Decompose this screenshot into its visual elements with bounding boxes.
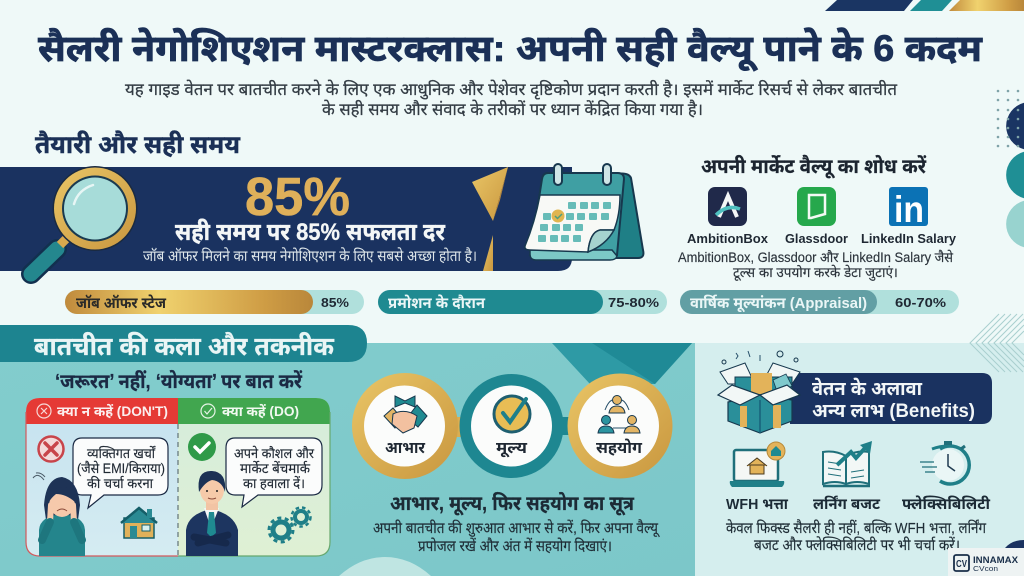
panel: 85 percent banner xyxy=(0,167,572,271)
illustration: worried woman xyxy=(33,473,85,556)
decoration: right edge circles and dots xyxy=(997,90,1024,247)
research labels: Glassdoor xyxy=(785,232,848,246)
research description: टूल्स का उपयोग करके डेटा जुटाएं। xyxy=(733,263,898,282)
circle: value: मूल्य xyxy=(496,440,528,458)
illustration: confident man xyxy=(186,471,238,556)
bar: job offer stage 85%: 85% xyxy=(321,296,349,310)
do header: क्या कहें (DO) xyxy=(222,403,299,419)
intro text: यह गाइड वेतन पर बातचीत करने के लिए एक आधुनिक और पेशेवर दृष्टिकोण प्रदान करती है। इसमें मार्केट रिसर्च से लेकर बातचीत xyxy=(125,80,898,100)
logo: Innamax CVcon xyxy=(948,540,1024,576)
heading tab: art of conversation: बातचीत की कला और तकनीक xyxy=(34,331,334,361)
logo: Innamax CVcon: CVcon xyxy=(973,564,998,573)
speech bubble: do: मार्केट बेंचमार्क xyxy=(240,460,311,476)
speech bubble: do xyxy=(226,438,322,507)
icon: green check xyxy=(188,433,216,461)
icon: gears xyxy=(269,508,310,542)
icon: stopwatch xyxy=(920,441,969,484)
text: benefits description: बजट और फ्लेक्सिबिलिटी पर भी चर्चा करें। xyxy=(754,536,960,554)
decoration: chevron lines xyxy=(970,314,1024,372)
title: सैलरी नेगोशिएशन मास्टरक्लास: अपनी सही वैल्यू पाने के 6 कदम xyxy=(38,27,983,71)
speech bubble: do: अपने कौशल और xyxy=(234,444,314,461)
benefit labels: फ्लेक्सिबिलिटी xyxy=(902,495,991,513)
speech bubble: do: का हवाला दें। xyxy=(243,475,305,491)
research description xyxy=(678,248,954,282)
panel: gratitude value collaboration circles xyxy=(352,373,672,479)
heading: formula: आभार, मूल्य, फिर सहयोग का सूत्र xyxy=(390,491,635,516)
research labels: AmbitionBox xyxy=(687,232,768,246)
speech bubble: don't xyxy=(73,438,168,508)
section heading: preparation: तैयारी और सही समय xyxy=(35,130,241,159)
top corner stripes xyxy=(825,0,1024,11)
speech bubble: don't: व्यक्तिगत खर्चों xyxy=(87,445,156,461)
don't header: क्या न कहें (DON'T) xyxy=(57,403,168,419)
text: formula description: प्रपोजल रखें और अंत में सहयोग दिखाएं। xyxy=(418,537,612,555)
research heading: अपनी मार्केट वैल्यू का शोध करें xyxy=(701,154,927,179)
bar: appraisal 60-70% xyxy=(680,290,959,314)
research description: AmbitionBox, Glassdoor और LinkedIn Salary जैसे xyxy=(678,248,954,265)
icon: red cross xyxy=(38,436,64,462)
intro text xyxy=(125,80,898,119)
heading tab: art of conversation xyxy=(0,325,367,362)
bar: job offer stage 85%: जॉब ऑफर स्टेज xyxy=(76,294,167,312)
speech bubble: don't: (जैसे EMI/किराया) xyxy=(77,459,165,476)
icon: book with arrow xyxy=(823,441,872,486)
icon: house xyxy=(121,508,157,538)
bar: during promotion 75-80% xyxy=(378,290,667,314)
don't header xyxy=(26,398,178,424)
icon: calendar xyxy=(525,164,643,260)
logo: Innamax CVcon: INNAMAX xyxy=(973,555,1018,565)
circle: collaboration: सहयोग xyxy=(596,439,643,457)
circle: value xyxy=(471,386,552,466)
icon: gift box xyxy=(718,351,800,433)
panel: benefits title pill: अन्य लाभ (Benefits) xyxy=(812,401,975,422)
big number: 85% xyxy=(245,167,350,227)
panel: benefits title pill: वेतन के अलावा xyxy=(812,377,922,400)
icon: WFH laptop xyxy=(730,442,785,487)
text: benefits description xyxy=(726,519,986,554)
research labels xyxy=(687,232,956,246)
panel: benefits background xyxy=(695,343,1024,576)
circle: gratitude: आभार xyxy=(385,440,426,457)
text: formula description: अपनी बातचीत की शुरुआत आभार से करें, फिर अपना वैल्यू xyxy=(373,519,660,538)
benefit labels: लर्निंग बजट xyxy=(813,495,881,513)
bar: appraisal 60-70%: 60-70% xyxy=(895,296,946,310)
icon: LinkedIn logo: in xyxy=(894,189,924,230)
panel: do and don't comparison xyxy=(26,398,330,556)
bar: appraisal 60-70%: वार्षिक मूल्यांकन (Appraisal) xyxy=(690,294,867,313)
banner headline: सही समय पर 85% सफलता दर xyxy=(175,218,445,246)
intro text: के सही समय और संवाद के तरीकों पर ध्यान केंद्रित किया गया है। xyxy=(322,100,703,119)
bar: during promotion 75-80%: प्रमोशन के दौरान xyxy=(388,294,486,312)
banner subtext: जॉब ऑफर मिलने का समय नेगोशिएशन के लिए सबसे अच्छा होता है। xyxy=(143,247,477,265)
circle: collaboration xyxy=(578,386,659,466)
bar: during promotion 75-80%: 75-80% xyxy=(608,296,659,310)
text: benefits description: केवल फिक्स्ड सैलरी ही नहीं, बल्कि WFH भत्ता, लर्निंग xyxy=(726,519,986,537)
speech bubble: don't: की चर्चा करना xyxy=(87,475,153,491)
panel: market value research xyxy=(678,154,956,282)
panel: negotiation technique background xyxy=(0,343,695,576)
panel: benefits title pill xyxy=(790,373,992,424)
text: formula description xyxy=(373,519,660,555)
research labels: LinkedIn Salary xyxy=(861,232,956,246)
decoration: teal triangles xyxy=(339,343,692,576)
subheading: need vs merit: ‘जरूरत’ नहीं, ‘योग्यता’ पर बात करें xyxy=(55,369,303,393)
logo: Innamax CVcon: CV xyxy=(956,559,967,570)
icon: AmbitionBox logo xyxy=(708,187,747,226)
bar: job offer stage 85% xyxy=(65,290,364,314)
benefit labels xyxy=(726,495,991,513)
icon: Glassdoor logo xyxy=(797,187,836,226)
icon: magnifying glass xyxy=(31,166,138,274)
benefit labels: WFH भत्ता xyxy=(726,496,789,513)
do header xyxy=(178,398,330,424)
circle: gratitude xyxy=(364,386,445,466)
